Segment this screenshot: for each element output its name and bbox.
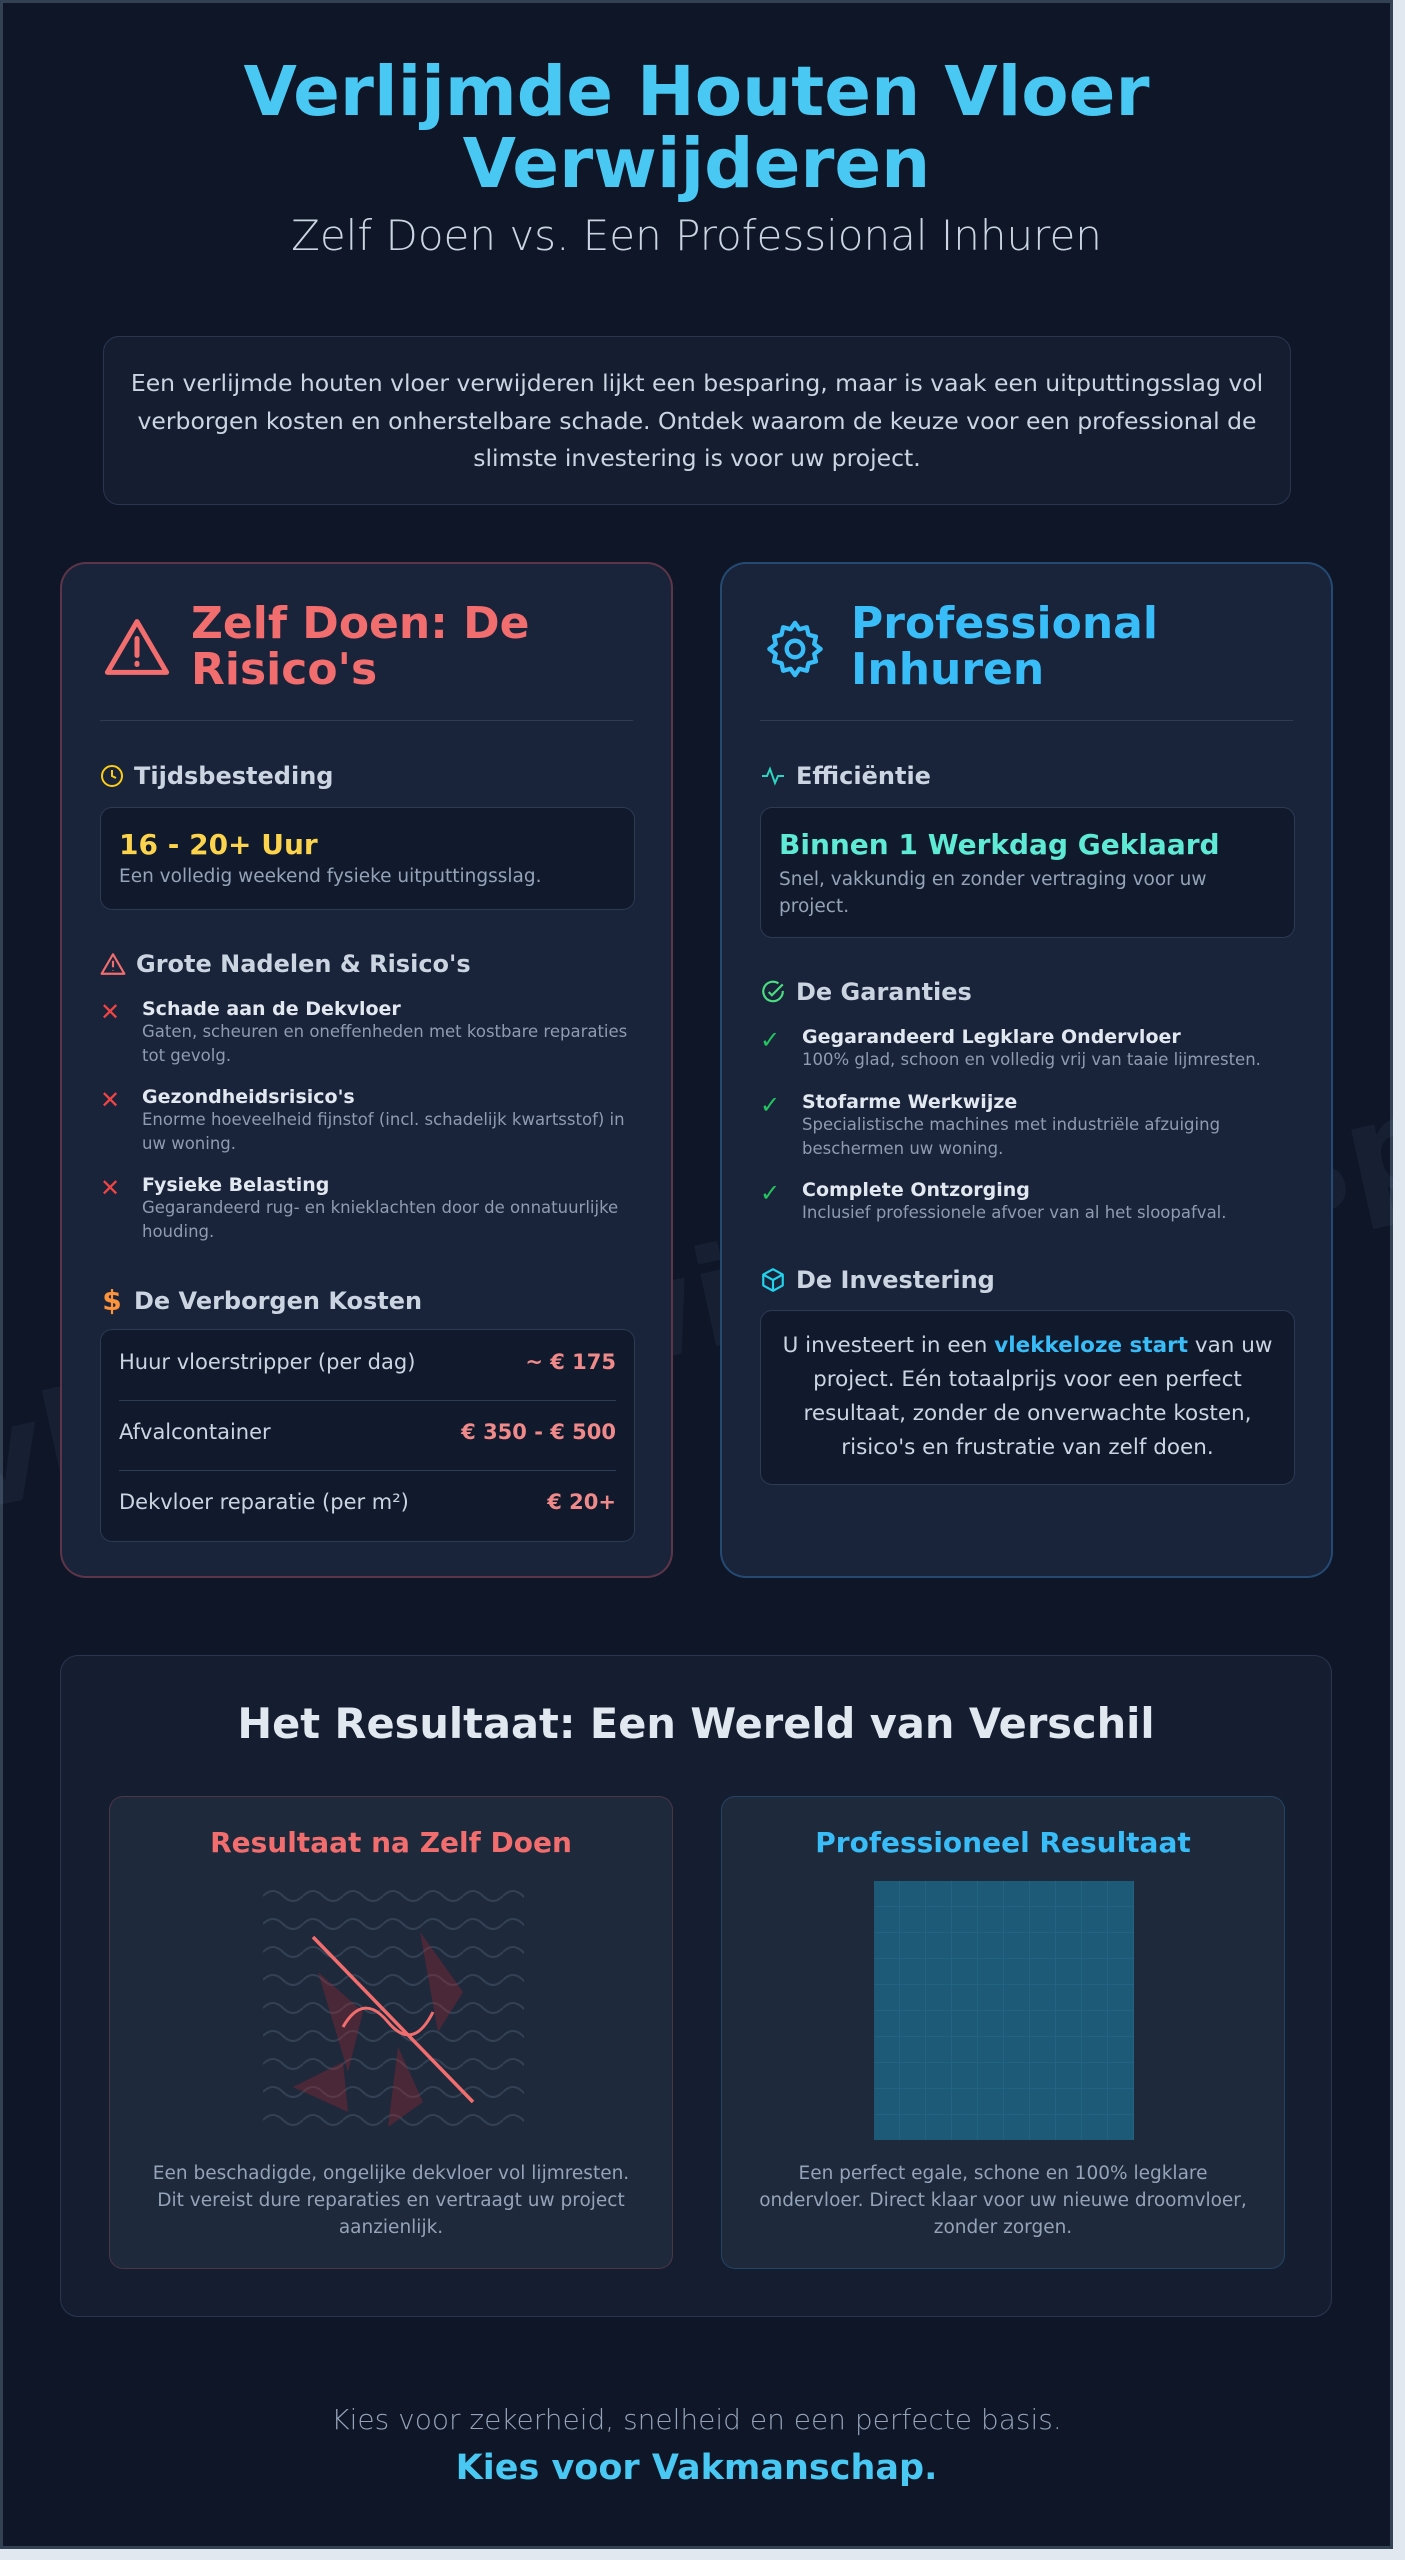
section: investering: De Investering <box>796 1266 995 1294</box>
item: gezondheid: Enorme hoeveelheid fijnstof (incl. schadelijk kwartsstof) in uw woning. <box>142 1110 625 1153</box>
item: gezondheid: Gezondheidsrisico's <box>142 1086 355 1108</box>
card: zelf doen resultaat: Een beschadigde, ongelijke dekvloer vol lijmresten. Dit vereist dure reparaties en vertraagt uw project aanzienlijk. <box>153 2163 629 2238</box>
footer tagline: Kies voor zekerheid, snelheid en een perfecte basis. <box>331 2403 1062 2436</box>
item: stofarm: Specialistische machines met industriële afzuiging beschermen uw woning. <box>802 1115 1220 1158</box>
cost table <box>100 1329 635 1542</box>
heading <box>191 598 530 695</box>
panel: zelf doen: ✕ <box>100 998 120 1026</box>
section: efficientie: Efficiëntie <box>796 762 931 790</box>
title: Verlijmde Houten Vloer <box>244 52 1150 132</box>
cost table: ~ € 175 <box>525 1350 616 1374</box>
section: nadelen: Grote Nadelen & Risico's <box>136 950 471 978</box>
item: schade: Schade aan de Dekvloer <box>142 998 401 1020</box>
time box <box>100 807 635 910</box>
item: legklaar: Gegarandeerd Legklare Ondervloer <box>802 1026 1181 1048</box>
time box: Een volledig weekend fysieke uitputtingsslag. <box>119 866 541 887</box>
cost table: € 350 - € 500 <box>461 1420 616 1444</box>
item: fysiek <box>100 1174 618 1241</box>
card: professioneel resultaat <box>721 1796 1285 2269</box>
card: zelf doen resultaat <box>109 1796 673 2269</box>
panel: zelf doen <box>60 562 673 1578</box>
panel: professional: ✓ <box>760 1179 780 1207</box>
heading: Risico's <box>191 644 377 695</box>
heading: Inhuren <box>851 644 1044 695</box>
section: kosten: $ <box>102 1284 122 1317</box>
title <box>244 52 1150 204</box>
heading: Professional <box>851 598 1158 649</box>
item: gezondheid <box>100 1086 625 1153</box>
panel: professional: ✓ <box>760 1026 780 1054</box>
item: ontzorging: Complete Ontzorging <box>802 1179 1030 1201</box>
heading: Zelf Doen: De <box>191 598 530 649</box>
card: professioneel resultaat: Een perfect egale, schone en 100% legklare ondervloer. Direct klaar voor uw nieuwe droomvloer, zonder zorgen. <box>759 2163 1247 2238</box>
intro text block <box>103 336 1291 505</box>
card: professioneel resultaat: Professioneel Resultaat <box>815 1826 1191 1859</box>
item: ontzorging: Inclusief professionele afvoer van al het sloopafval. <box>802 1203 1227 1222</box>
investment box <box>760 1310 1295 1485</box>
intro text block: Een verlijmde houten vloer verwijderen lijkt een besparing, maar is vaak een uitputtingsslag vol verborgen kosten en onherstelbare schade. Ontdek waarom de keuze voor een professional de slimste investering is voor uw project. <box>131 369 1263 472</box>
item: schade <box>100 998 627 1065</box>
heading: Het Resultaat: Een Wereld van Verschil <box>237 1699 1155 1748</box>
icon: gear <box>767 620 823 678</box>
item: schade: Gaten, scheuren en oneffenheden met kostbare reparaties tot gevolg. <box>142 1022 627 1065</box>
cost table: € 20+ <box>547 1490 616 1514</box>
subtitle: Zelf Doen vs. Een Professional Inhuren <box>291 211 1102 260</box>
panel: resultaat <box>60 1655 1332 2317</box>
efficiency box: Snel, vakkundig en zonder vertraging voor uw project. <box>779 869 1206 917</box>
efficiency box: Binnen 1 Werkdag Geklaard <box>779 828 1220 861</box>
investment box: U investeert in een vlekkeloze start van uw project. Eén totaalprijs voor een perfect resultaat, zonder de onverwachte kosten, risico's en frustratie van zelf doen. <box>783 1333 1272 1460</box>
cost table: Afvalcontainer <box>119 1420 271 1444</box>
item: legklaar: 100% glad, schoon en volledig vrij van taaie lijmresten. <box>802 1050 1261 1069</box>
time box: 16 - 20+ Uur <box>119 828 318 861</box>
section: tijdsbesteding: Tijdsbesteding <box>134 762 333 790</box>
panel: professional: ✓ <box>760 1091 780 1119</box>
panel: zelf doen: ✕ <box>100 1174 120 1202</box>
footer call to action: Kies voor Vakmanschap. <box>456 2448 937 2488</box>
item: fysiek: Gegarandeerd rug- en knieklachten door de onnatuurlijke houding. <box>142 1198 618 1241</box>
efficiency box <box>760 807 1295 938</box>
item: fysiek: Fysieke Belasting <box>142 1174 329 1196</box>
illustration: clean floor <box>874 1881 1134 2140</box>
panel: professional <box>720 562 1333 1578</box>
card: zelf doen resultaat: Resultaat na Zelf Doen <box>210 1826 572 1859</box>
icon: warning <box>104 619 170 675</box>
panel: zelf doen: ✕ <box>100 1086 120 1114</box>
title: Verwijderen <box>463 124 930 204</box>
item: stofarm <box>760 1091 1220 1158</box>
illustration: damaged floor <box>263 1890 524 2127</box>
cost table: Huur vloerstripper (per dag) <box>119 1350 415 1374</box>
item: legklaar <box>760 1026 1261 1069</box>
item: ontzorging <box>760 1179 1227 1222</box>
section: kosten: De Verborgen Kosten <box>134 1286 422 1314</box>
section: garanties: De Garanties <box>796 978 972 1006</box>
cost table: Dekvloer reparatie (per m²) <box>119 1490 409 1514</box>
item: stofarm: Stofarme Werkwijze <box>802 1091 1017 1113</box>
heading <box>851 598 1158 695</box>
